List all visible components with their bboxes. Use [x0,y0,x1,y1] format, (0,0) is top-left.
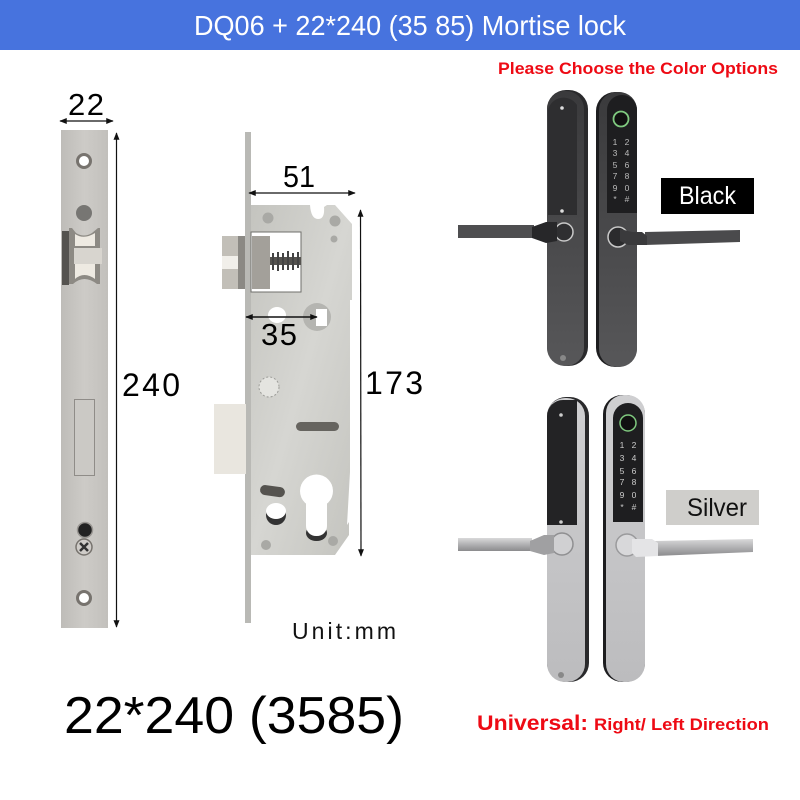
black color label: Black [679,182,736,210]
keypad [620,440,637,512]
keypad: 8 [625,171,630,181]
silver lock product [458,395,753,682]
keypad: 7 [613,171,618,181]
fingerprint sensor [614,112,628,126]
keypad: 9 [620,490,625,500]
keypad: 1 [613,137,618,147]
icon: cylinder hole [78,522,92,538]
keypad: # [625,194,630,204]
dimension: 240 height: 240 [122,367,180,403]
deadbolt slot [74,400,94,476]
icon: upper screw [76,205,92,221]
euro cylinder cutout [300,474,333,541]
left lever hub [532,222,573,243]
keypad [613,137,630,204]
keypad: 9 [613,183,618,193]
dimension: 51 width: 51 [283,159,315,194]
keypad: 2 [625,137,630,147]
keypad: * [613,194,617,204]
front plate [603,395,645,682]
header banner [0,0,800,50]
keypad: 0 [632,490,637,500]
keypad: # [632,502,637,512]
mortise lock case side view [214,132,352,623]
left handle bar [458,538,532,551]
color options notice: Please Choose the Color Options [498,59,778,78]
universal direction note: Right/ Left Direction [594,715,769,734]
unit label: Unit:mm [292,618,396,644]
forend plate [245,132,251,623]
keypad: 6 [625,160,630,170]
case body [251,205,352,555]
keypad: 1 [620,440,625,450]
keypad: 7 [620,477,625,487]
keypad: 8 [632,477,637,487]
left handle bar [458,225,534,238]
right handle [608,227,740,247]
keypad: 3 [613,148,618,158]
right handle [616,534,753,557]
keypad: 3 [620,453,625,463]
faceplate front view [61,130,108,628]
back plate [547,397,589,682]
keypad: 5 [620,466,625,476]
silver color label [666,490,759,525]
dimension: 51 width [249,159,355,194]
deadbolt [214,404,246,474]
black lock product [458,90,740,367]
round hole [266,503,286,525]
spring window [251,232,301,292]
keypad: 4 [625,148,630,158]
icon: top screw hole [78,154,90,168]
rivets [261,212,340,550]
latch cutout [62,228,102,285]
icon: cross screw [76,539,92,555]
model size caption: 22*240 (3585) [64,687,404,745]
dimension: 35 backset [246,317,317,352]
front plate [596,92,637,367]
header banner: DQ06 + 22*240 (35 85) Mortise lock [194,10,627,41]
dimension: 22 width: 22 [68,87,104,122]
keypad: 5 [613,160,618,170]
keypad: 4 [632,453,637,463]
keypad: * [620,502,624,512]
dimension: 22 width [60,87,113,122]
universal direction note: Universal: [477,712,588,735]
oval slot [259,484,286,498]
dimension: 173 height: 173 [365,365,423,401]
rosette [259,377,279,397]
rivet slot [296,422,339,431]
universal direction note [477,712,769,735]
small hole [268,307,286,323]
keypad: 2 [632,440,637,450]
latch bolt [222,236,245,289]
keypad: 0 [625,183,630,193]
silver color label: Silver [687,494,747,522]
fingerprint sensor [620,415,636,431]
dimension: 35 backset: 35 [261,317,297,352]
icon: bottom screw hole [78,592,90,604]
spindle hole [303,303,331,331]
black color label [661,178,754,214]
back plate [547,90,588,366]
keypad: 6 [632,466,637,476]
left lever hub [530,533,573,555]
